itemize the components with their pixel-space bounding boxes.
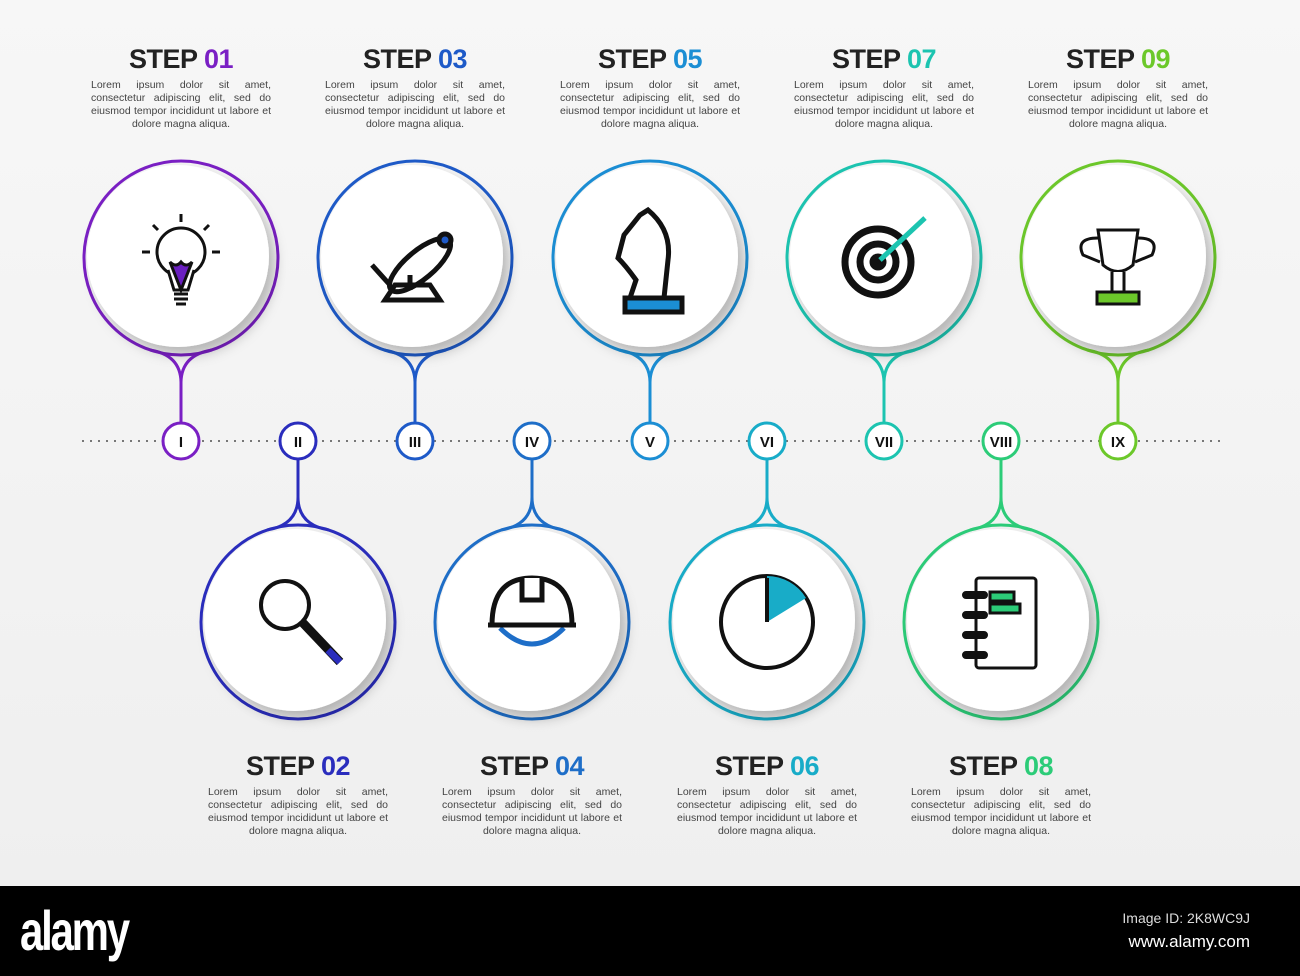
step 1 node — [84, 161, 278, 459]
roman numerals: VII — [875, 434, 893, 451]
text: step 06 — [677, 751, 857, 837]
text: step 01: Lorem ipsum dolor sit amet, consectetur adipiscing elit, sed do eiusmod tempor incididunt ut labore et dolore magna aliqua. — [91, 79, 271, 130]
roman numerals: VIII — [990, 434, 1012, 451]
text: step 04 — [442, 751, 622, 837]
text: step 07: Lorem ipsum dolor sit amet, consectetur adipiscing elit, sed do eiusmod tempor incididunt ut labore et dolore magna aliqua. — [794, 79, 974, 130]
text: step 08: Lorem ipsum dolor sit amet, consectetur adipiscing elit, sed do eiusmod tempor incididunt ut labore et dolore magna aliqua. — [911, 786, 1091, 837]
text: step 07 — [794, 44, 974, 130]
text: step 03 — [325, 44, 505, 130]
icon: notebook — [966, 578, 1036, 668]
step 2 node — [201, 423, 395, 719]
text: step 01: STEP 01 — [129, 44, 233, 74]
step 9 node — [1021, 161, 1215, 459]
text: step 09 — [1028, 44, 1208, 130]
roman numerals: III — [409, 434, 421, 451]
text: step 07: STEP 07 — [832, 44, 936, 74]
step 3 node — [318, 161, 512, 459]
icon: chess knight — [618, 210, 682, 312]
roman numerals — [179, 434, 1125, 451]
white discs — [87, 165, 1206, 711]
text: step 06: STEP 06 — [715, 751, 819, 781]
icon: clock — [721, 576, 813, 668]
text: step 04: Lorem ipsum dolor sit amet, consectetur adipiscing elit, sed do eiusmod tempor incididunt ut labore et dolore magna aliqua. — [442, 786, 622, 837]
roman numerals: VI — [760, 434, 774, 451]
roman numerals: IV — [525, 434, 539, 451]
timeline dotted — [82, 440, 1220, 442]
icon: bulb — [142, 214, 220, 304]
text: step 03: STEP 03 — [363, 44, 467, 74]
text: step 04: STEP 04 — [480, 751, 584, 781]
icon: target — [845, 218, 925, 295]
step 7 node — [787, 161, 981, 459]
icon: magnifier — [261, 581, 340, 662]
text: step 03: Lorem ipsum dolor sit amet, consectetur adipiscing elit, sed do eiusmod tempor incididunt ut labore et dolore magna aliqua. — [325, 79, 505, 130]
text: step 02: Lorem ipsum dolor sit amet, consectetur adipiscing elit, sed do eiusmod tempor incididunt ut labore et dolore magna aliqua. — [208, 786, 388, 837]
footer bar: www.alamy.com — [1128, 932, 1250, 951]
image id: Image ID: 2K8WC9J — [1122, 910, 1250, 926]
text: step 06: Lorem ipsum dolor sit amet, consectetur adipiscing elit, sed do eiusmod tempor incididunt ut labore et dolore magna aliqua. — [677, 786, 857, 837]
icon: trophy — [1081, 230, 1154, 304]
text: step 05: STEP 05 — [598, 44, 702, 74]
text: step 02: STEP 02 — [246, 751, 350, 781]
logo: alamy — [20, 899, 128, 962]
text: step 09: Lorem ipsum dolor sit amet, consectetur adipiscing elit, sed do eiusmod tempor incididunt ut labore et dolore magna aliqua. — [1028, 79, 1208, 130]
step 8 node — [904, 423, 1098, 719]
text: step 01 — [91, 44, 271, 130]
icon: microscope — [372, 230, 458, 300]
footer bar — [0, 886, 1300, 976]
step 4 node — [435, 423, 629, 719]
step 6 node — [670, 423, 864, 719]
roman numerals: I — [179, 434, 183, 451]
text: step 08: STEP 08 — [949, 751, 1053, 781]
roman numerals: II — [294, 434, 302, 451]
text: step 08 — [911, 751, 1091, 837]
text: step 05 — [560, 44, 740, 130]
text: step 02 — [208, 751, 388, 837]
roman numerals: IX — [1111, 434, 1125, 451]
step 5 node — [553, 161, 747, 459]
icon: helmet — [488, 578, 576, 644]
roman numerals: V — [645, 434, 655, 451]
text: step 09: STEP 09 — [1066, 44, 1170, 74]
text: step 05: Lorem ipsum dolor sit amet, consectetur adipiscing elit, sed do eiusmod tempor incididunt ut labore et dolore magna aliqua. — [560, 79, 740, 130]
